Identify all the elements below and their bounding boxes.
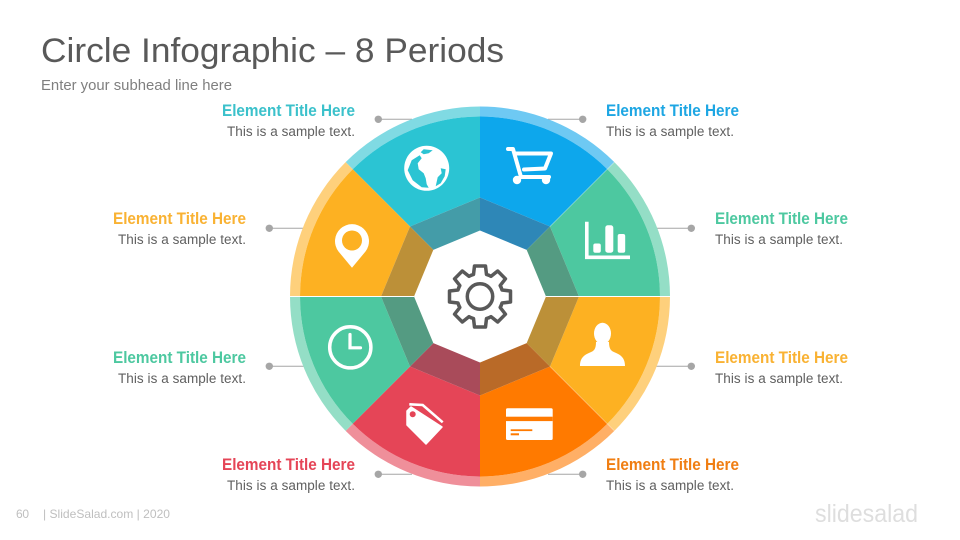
label: top right	[606, 101, 739, 139]
label: bottom left: Element Title Here	[222, 455, 355, 474]
label: left upper: Element Title Here	[113, 209, 246, 228]
label: left upper: This is a sample text.	[118, 232, 246, 247]
label: left lower: This is a sample text.	[118, 371, 246, 386]
label: bottom left	[222, 455, 355, 493]
title: Circle Infographic – 8 Periods	[41, 32, 504, 70]
icon: price tag	[407, 404, 443, 444]
label: top left	[222, 101, 355, 139]
connector: bottom right	[548, 471, 586, 478]
label: right lower	[715, 348, 848, 386]
segment: bottom right orange	[480, 343, 614, 486]
connector: right lower	[655, 363, 695, 370]
logo wordmark: slidesalad	[815, 500, 918, 528]
segment: left upper yellow	[290, 162, 433, 296]
connector: bottom left	[375, 471, 412, 478]
segment: top left teal	[346, 106, 480, 250]
label: top right: This is a sample text.	[606, 124, 734, 139]
label: bottom right: Element Title Here	[606, 455, 739, 474]
label: left upper	[113, 209, 246, 247]
icon: clock	[330, 327, 371, 368]
label: right upper: This is a sample text.	[715, 232, 843, 247]
label: top left: This is a sample text.	[227, 124, 355, 139]
label: top left: Element Title Here	[222, 101, 355, 120]
icon: shopping cart	[508, 149, 551, 184]
label: right lower: Element Title Here	[715, 348, 848, 367]
connector: top right	[548, 116, 586, 123]
icon: map pin	[335, 224, 369, 268]
connector: top left	[375, 116, 412, 123]
label: right upper: Element Title Here	[715, 209, 848, 228]
icon: globe	[404, 146, 449, 191]
footer: page number: 60	[16, 507, 29, 521]
connector: right upper	[655, 225, 695, 232]
label: left lower	[113, 348, 246, 386]
label: right lower: This is a sample text.	[715, 371, 843, 386]
label: left lower: Element Title Here	[113, 348, 246, 367]
segment: right upper green	[527, 162, 670, 296]
label: right upper	[715, 209, 848, 247]
label: top right: Element Title Here	[606, 101, 739, 120]
label: bottom right: This is a sample text.	[606, 478, 734, 493]
icon: credit card	[506, 408, 553, 440]
connector: left lower	[266, 363, 305, 370]
segment: left lower green	[290, 296, 433, 431]
subhead: Enter your subhead line here	[41, 78, 232, 94]
segment: bottom left red	[346, 343, 480, 486]
icon: center gear	[450, 266, 510, 327]
label: bottom left: This is a sample text.	[227, 478, 355, 493]
icon: bar chart	[585, 222, 630, 259]
label: bottom right	[606, 455, 739, 493]
segment: top right blue	[480, 106, 614, 250]
footer: source: | SlideSalad.com | 2020	[43, 507, 170, 521]
icon: person	[580, 323, 625, 366]
connector: left upper	[266, 225, 305, 232]
segment: right lower yellow	[527, 296, 670, 431]
